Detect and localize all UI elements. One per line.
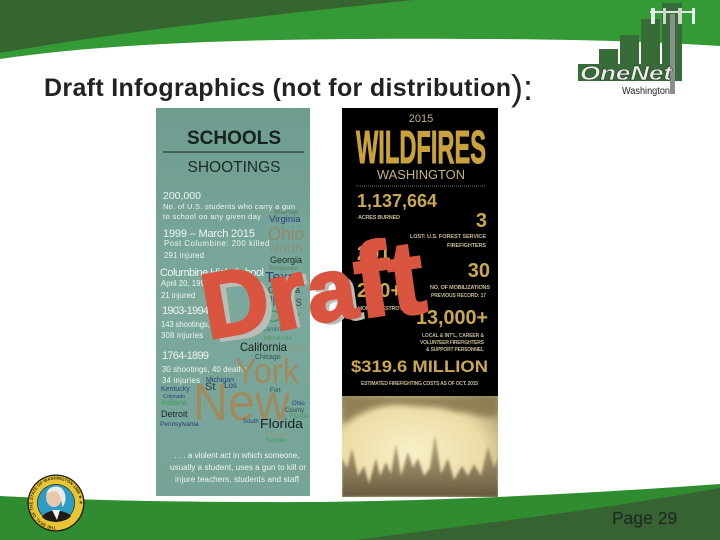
heading: wildfires [356, 113, 486, 186]
word cloud: Los [224, 381, 237, 390]
definition text: usually a student, uses a gun to kill or [170, 463, 306, 472]
statistics text: 200,000 [163, 190, 201, 202]
statistics: 30 [468, 260, 490, 282]
word cloud: St [205, 381, 215, 393]
word cloud: California [240, 340, 287, 354]
statistics text: 1764-1899 [162, 350, 209, 362]
page number: Page 29 [612, 508, 677, 528]
logo: OneNet Washington [578, 3, 695, 97]
word cloud: Florida [290, 414, 309, 420]
word cloud: Georgia [268, 285, 300, 295]
letter shadow: D [203, 253, 283, 363]
statistics: ESTIMATED FIREFIGHTING COSTS AS OF OCT. 2015 [361, 381, 478, 387]
tower [650, 8, 695, 94]
statistics text: No. of U.S. students who carry a gun [163, 202, 295, 211]
logo wordmark: OneNet [580, 63, 674, 85]
seal ring text: THE SEAL OF THE STATE OF WASHINGTON 1889 ★ ★ [30, 476, 83, 530]
statistics: ACRES BURNED [358, 215, 400, 221]
statistics: FIREFIGHTERS [447, 243, 486, 249]
word cloud: Kentucky [161, 386, 190, 393]
word cloud: York [235, 352, 299, 391]
word cloud: Ohio [292, 401, 305, 407]
word cloud: Pennsylvania [160, 421, 199, 428]
statistics text: 291 injured [164, 251, 204, 260]
word cloud: Missouri [266, 432, 288, 438]
statistics: HOMES DESTROYED [358, 306, 410, 312]
word cloud: Colorado [163, 394, 185, 400]
heading: schools shootings: SCHOOLS [187, 128, 281, 149]
word cloud: County [285, 408, 304, 414]
statistics: 200+ [357, 280, 402, 302]
statistics [351, 191, 490, 387]
bottom banner [0, 484, 720, 540]
statistics text: 308 injuries [161, 331, 203, 340]
heading: schools shootings: SHOOTINGS [188, 159, 280, 176]
letter shadow: r [263, 239, 322, 352]
statistics: VOLUNTEER FIREFIGHTERS [420, 340, 485, 346]
panel background [156, 108, 310, 496]
heading: wildfires: WASHINGTON [377, 167, 465, 182]
word cloud: Chicago [255, 354, 281, 361]
letter shadow [203, 239, 368, 363]
word cloud: Carolina [262, 327, 285, 333]
logo subtitle: Washington [622, 86, 670, 97]
letter shadow: a [305, 240, 368, 345]
statistics text: April 20, 1999: 13 killed, [161, 279, 244, 288]
statistics text [160, 190, 295, 385]
infographic: wildfires [342, 108, 498, 497]
draft letters: r [258, 239, 317, 352]
photo: forest fire [342, 396, 498, 497]
icon: Washington state seal [28, 474, 84, 532]
statistics text: 143 shootings, 144 deaths [161, 320, 249, 329]
watermark: Draft [194, 219, 432, 363]
statistics text: 30 shootings, 40 deaths [162, 365, 247, 374]
word cloud: New [193, 374, 290, 432]
draft letters: D [194, 247, 277, 359]
word cloud: Arkansas [273, 210, 298, 216]
word cloud: Ohio [268, 224, 304, 244]
statistics: $319.6 MILLION [351, 357, 488, 376]
statistics: LOCAL & INT'L, CAREER & [422, 333, 484, 339]
statistics text: 34 injuries [162, 376, 200, 385]
statistics: NO. OF MOBILIZATIONS [430, 285, 490, 291]
top banner [0, 0, 720, 59]
heading: schools shootings [163, 128, 304, 176]
heading: wildfires: 2015 [409, 113, 433, 125]
word cloud: Indiana [161, 398, 188, 407]
statistics: & SUPPORT PERSONNEL [426, 347, 484, 353]
statistics: 13,000+ [416, 307, 488, 329]
infographic: school shootings [156, 108, 310, 496]
statistics: 201 [357, 243, 390, 265]
word cloud: Illinois [266, 293, 302, 309]
word cloud: Florida [260, 416, 304, 431]
statistics text: to school on any given day [163, 212, 261, 221]
word cloud [160, 210, 309, 444]
statistics text: 1903-1994 [162, 305, 209, 317]
word cloud: Fort [270, 388, 281, 394]
draft letters: f [347, 221, 398, 341]
word cloud: Detroit [161, 409, 188, 419]
draft letters: a [300, 237, 363, 342]
statistics text: 21 injured [161, 291, 195, 300]
heading: wildfires: WILDFIRES [356, 121, 486, 173]
signal bars [578, 3, 682, 81]
statistics: 1,137,664 [357, 191, 437, 211]
word cloud: Virginia [269, 214, 301, 225]
definition text: . . . a violent act in which someone, [174, 451, 300, 460]
title [44, 67, 533, 108]
title: Draft Infographics (not for distribution [44, 74, 511, 102]
word cloud: Georgia [270, 255, 302, 265]
word cloud: Michigan [206, 377, 234, 384]
word cloud: San [289, 343, 307, 354]
statistics text: 1999 – March 2015 [163, 228, 255, 240]
word cloud: Minnesota [264, 336, 292, 342]
statistics text: Columbine High School [160, 267, 264, 279]
panel background [342, 108, 498, 396]
definition text [170, 451, 306, 484]
word cloud: South [243, 419, 259, 425]
draft letters [194, 219, 432, 359]
draft letters: t [381, 219, 432, 339]
word cloud: North [269, 240, 303, 256]
word cloud: Tennessee [268, 266, 298, 272]
portrait [42, 510, 71, 522]
title: ): [511, 67, 533, 108]
statistics: 3 [476, 210, 487, 232]
statistics text: Post Columbine: 200 killed, [164, 239, 272, 248]
word cloud: City [266, 307, 301, 326]
statistics: PREVIOUS RECORD: 17 [431, 293, 486, 299]
word cloud: Kansas [266, 438, 286, 444]
definition text: injure teachers, students and staff [175, 475, 300, 484]
word cloud: Texas [265, 269, 303, 286]
statistics: LOST: U.S. FOREST SERVICE [410, 234, 486, 240]
